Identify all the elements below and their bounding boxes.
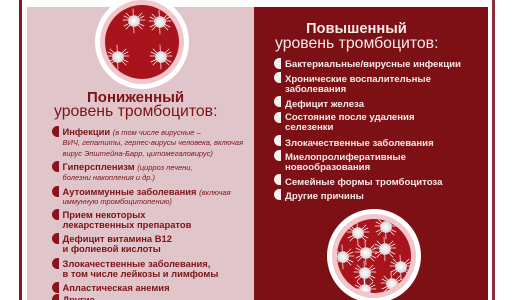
- item: myeloproliferative: [274, 150, 406, 173]
- item: malignant: Злокачественные заболевания: [285, 138, 434, 149]
- item: malignant: Злокачественные заболевания,: [62, 258, 210, 269]
- item: iron: Дефицит железа: [285, 99, 364, 110]
- item: aplastic anemia: Апластическая анемия: [62, 282, 170, 293]
- item: autoimmune: Аутоиммунные заболевания (включая: [62, 186, 231, 197]
- icon: blood drop with few platelets: [95, 0, 189, 89]
- item: infections: ВИЧ, гепатиты, герпес-вирусы человека, включая: [62, 138, 243, 147]
- bullet list: low causes: [52, 126, 243, 300]
- item: malignant: в том числе лейкозы и лимфомы: [62, 268, 218, 279]
- item: malignant: [52, 258, 218, 279]
- item: myeloproliferative: Миелопролиферативные: [285, 152, 406, 163]
- item: autoimmune: иммунную тромбоцитопению): [62, 197, 172, 206]
- item: other: Другие причины: [285, 191, 364, 202]
- item: infections: Инфекции (в том числе вирусные –: [62, 126, 201, 137]
- item: hypersplenism: [52, 161, 193, 182]
- item: medications: [52, 209, 191, 230]
- right frame line: [492, 0, 495, 300]
- item: infections: [52, 126, 243, 158]
- item: splenectomy: [274, 112, 415, 133]
- panel background: [27, 7, 254, 300]
- panel: low platelets: [27, 0, 254, 300]
- item: vitamin deficiency: и фолиевой кислоты: [62, 243, 161, 254]
- item: hypersplenism: Гиперспленизм (цирроз печени,: [62, 161, 193, 172]
- heading: low: Пониженный: [87, 89, 184, 106]
- item: medications: лекарственных препаратов: [62, 219, 191, 230]
- content layer: [274, 22, 460, 300]
- item: infections: Бактериальные/вирусные инфекции: [285, 59, 461, 70]
- left frame line: [19, 0, 22, 300]
- heading: high: Повышенный: [306, 21, 407, 37]
- item: infections: вирус Эпштейна-Барр, цитомегаловирус): [62, 149, 213, 158]
- panel: high platelets: [254, 7, 488, 300]
- item: medications: Прием некоторых: [62, 209, 145, 220]
- bullet list: high causes: [274, 58, 461, 202]
- item: hypersplenism: болезни накопления и др.): [62, 173, 155, 182]
- item: chronic: [274, 72, 431, 95]
- item: vitamin deficiency: [52, 233, 172, 254]
- subheading: high: уровень тромбоцитов:: [275, 35, 438, 52]
- item: splenectomy: селезенки: [285, 122, 333, 133]
- item: chronic: заболевания: [285, 84, 346, 95]
- item: autoimmune: [52, 186, 231, 206]
- item: splenectomy: Состояние после удаления: [285, 112, 415, 123]
- item: familial: Семейные формы тромбоцитоза: [285, 177, 442, 188]
- subheading: low: уровень тромбоцитов:: [54, 103, 217, 120]
- item: myeloproliferative: новообразования: [285, 162, 370, 173]
- icon: blood drop with many platelets: [327, 209, 421, 300]
- item: vitamin deficiency: Дефицит витамина В12: [62, 233, 172, 244]
- item: chronic: Хронические воспалительные: [285, 74, 431, 85]
- item: iron: [274, 96, 364, 110]
